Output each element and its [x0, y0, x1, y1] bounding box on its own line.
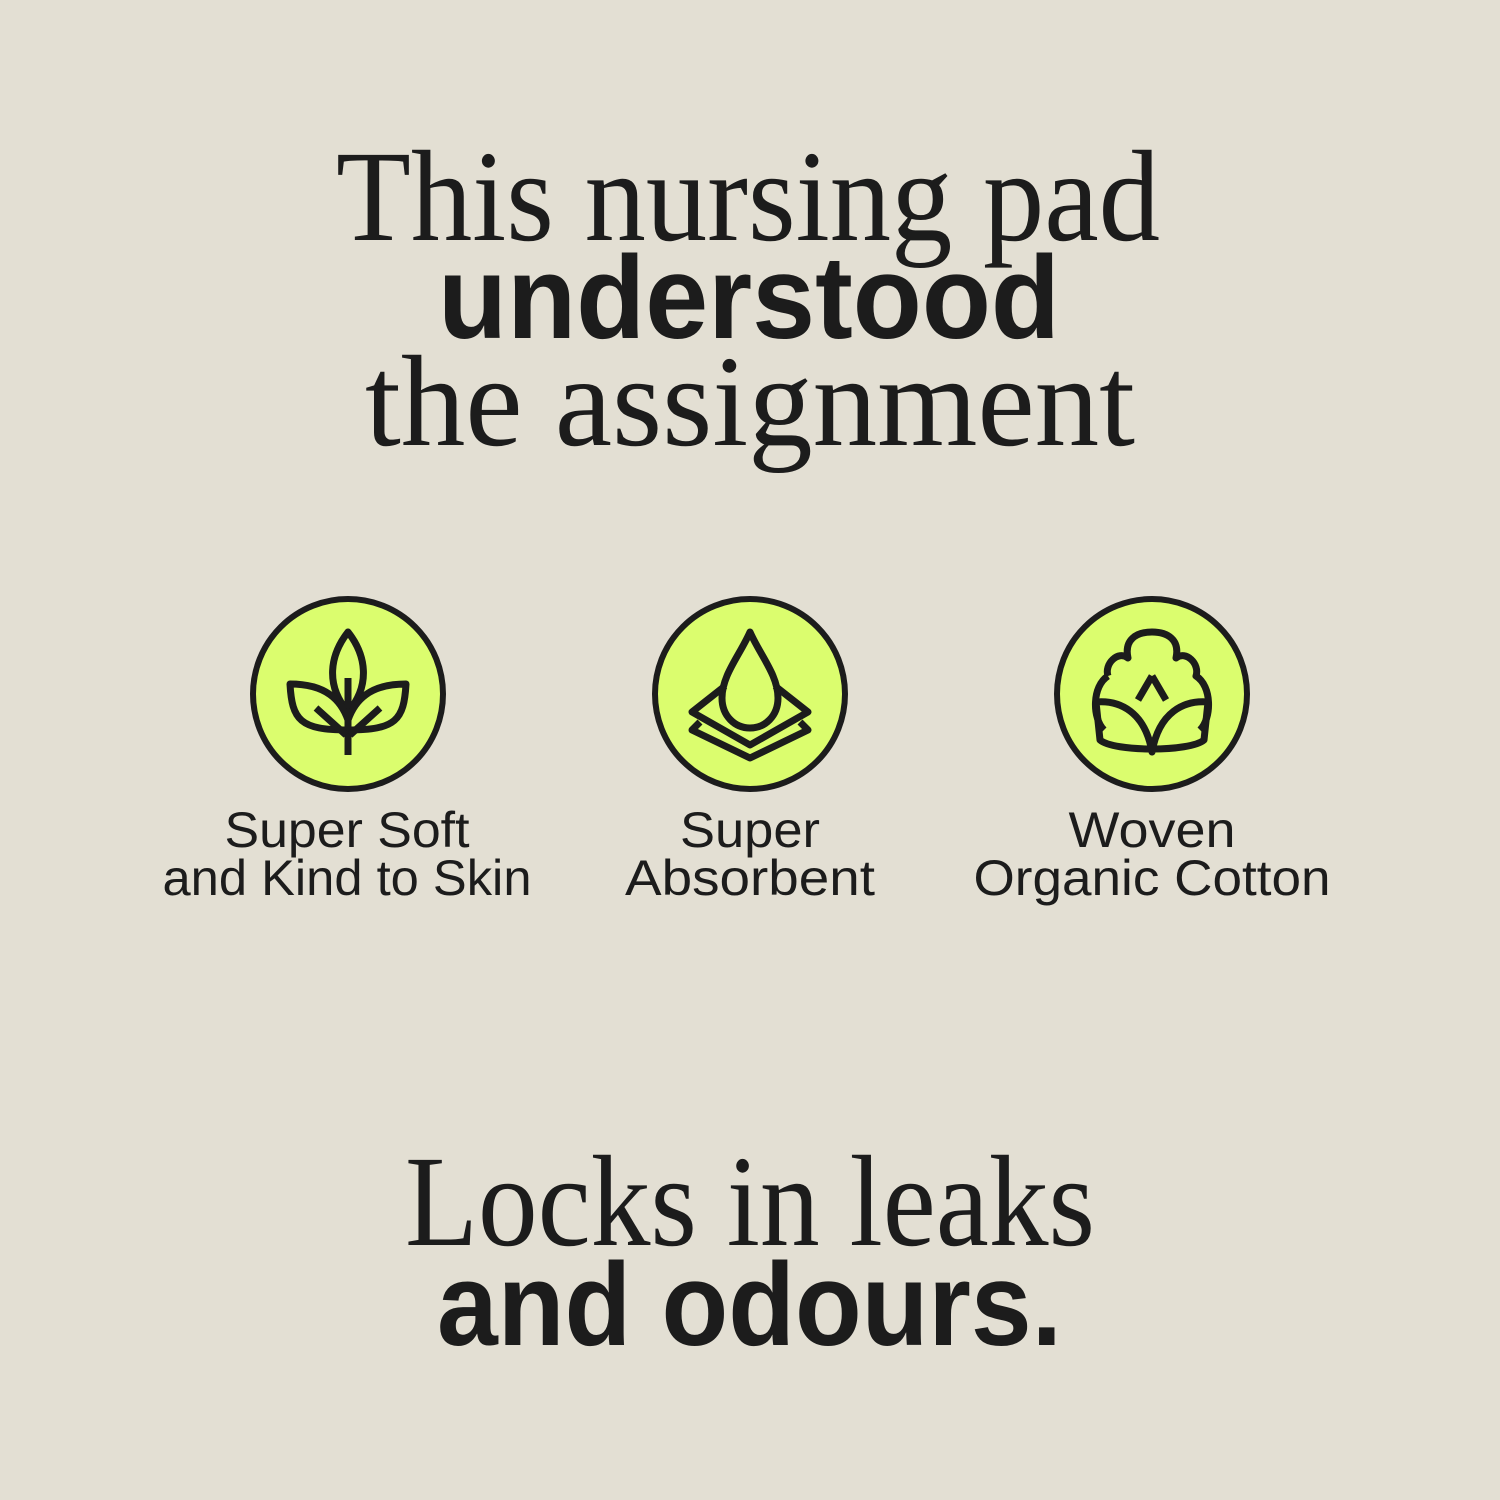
bottom tagline: and odours. [437, 1239, 1062, 1371]
icon: cotton [1057, 599, 1247, 789]
title: This nursing pad [336, 125, 1160, 269]
label: absorbent [625, 802, 875, 906]
bottom tagline [405, 1130, 1095, 1371]
icon: absorbent drop [655, 599, 845, 789]
label: absorbent: Super [680, 802, 820, 858]
title: understood [438, 232, 1060, 364]
label: cotton [974, 802, 1330, 906]
icon: leaf [253, 599, 443, 789]
bottom tagline: Locks in leaks [405, 1130, 1095, 1274]
feature labels [162, 802, 1330, 906]
label: super soft [162, 802, 532, 906]
label: cotton: Woven [1068, 802, 1236, 858]
title: the assignment [365, 330, 1135, 474]
label: cotton: Organic Cotton [974, 850, 1330, 906]
label: super soft: Super Soft [224, 802, 470, 858]
label: absorbent: Absorbent [625, 850, 875, 906]
label: super soft: and Kind to Skin [162, 850, 532, 906]
title [336, 125, 1160, 474]
